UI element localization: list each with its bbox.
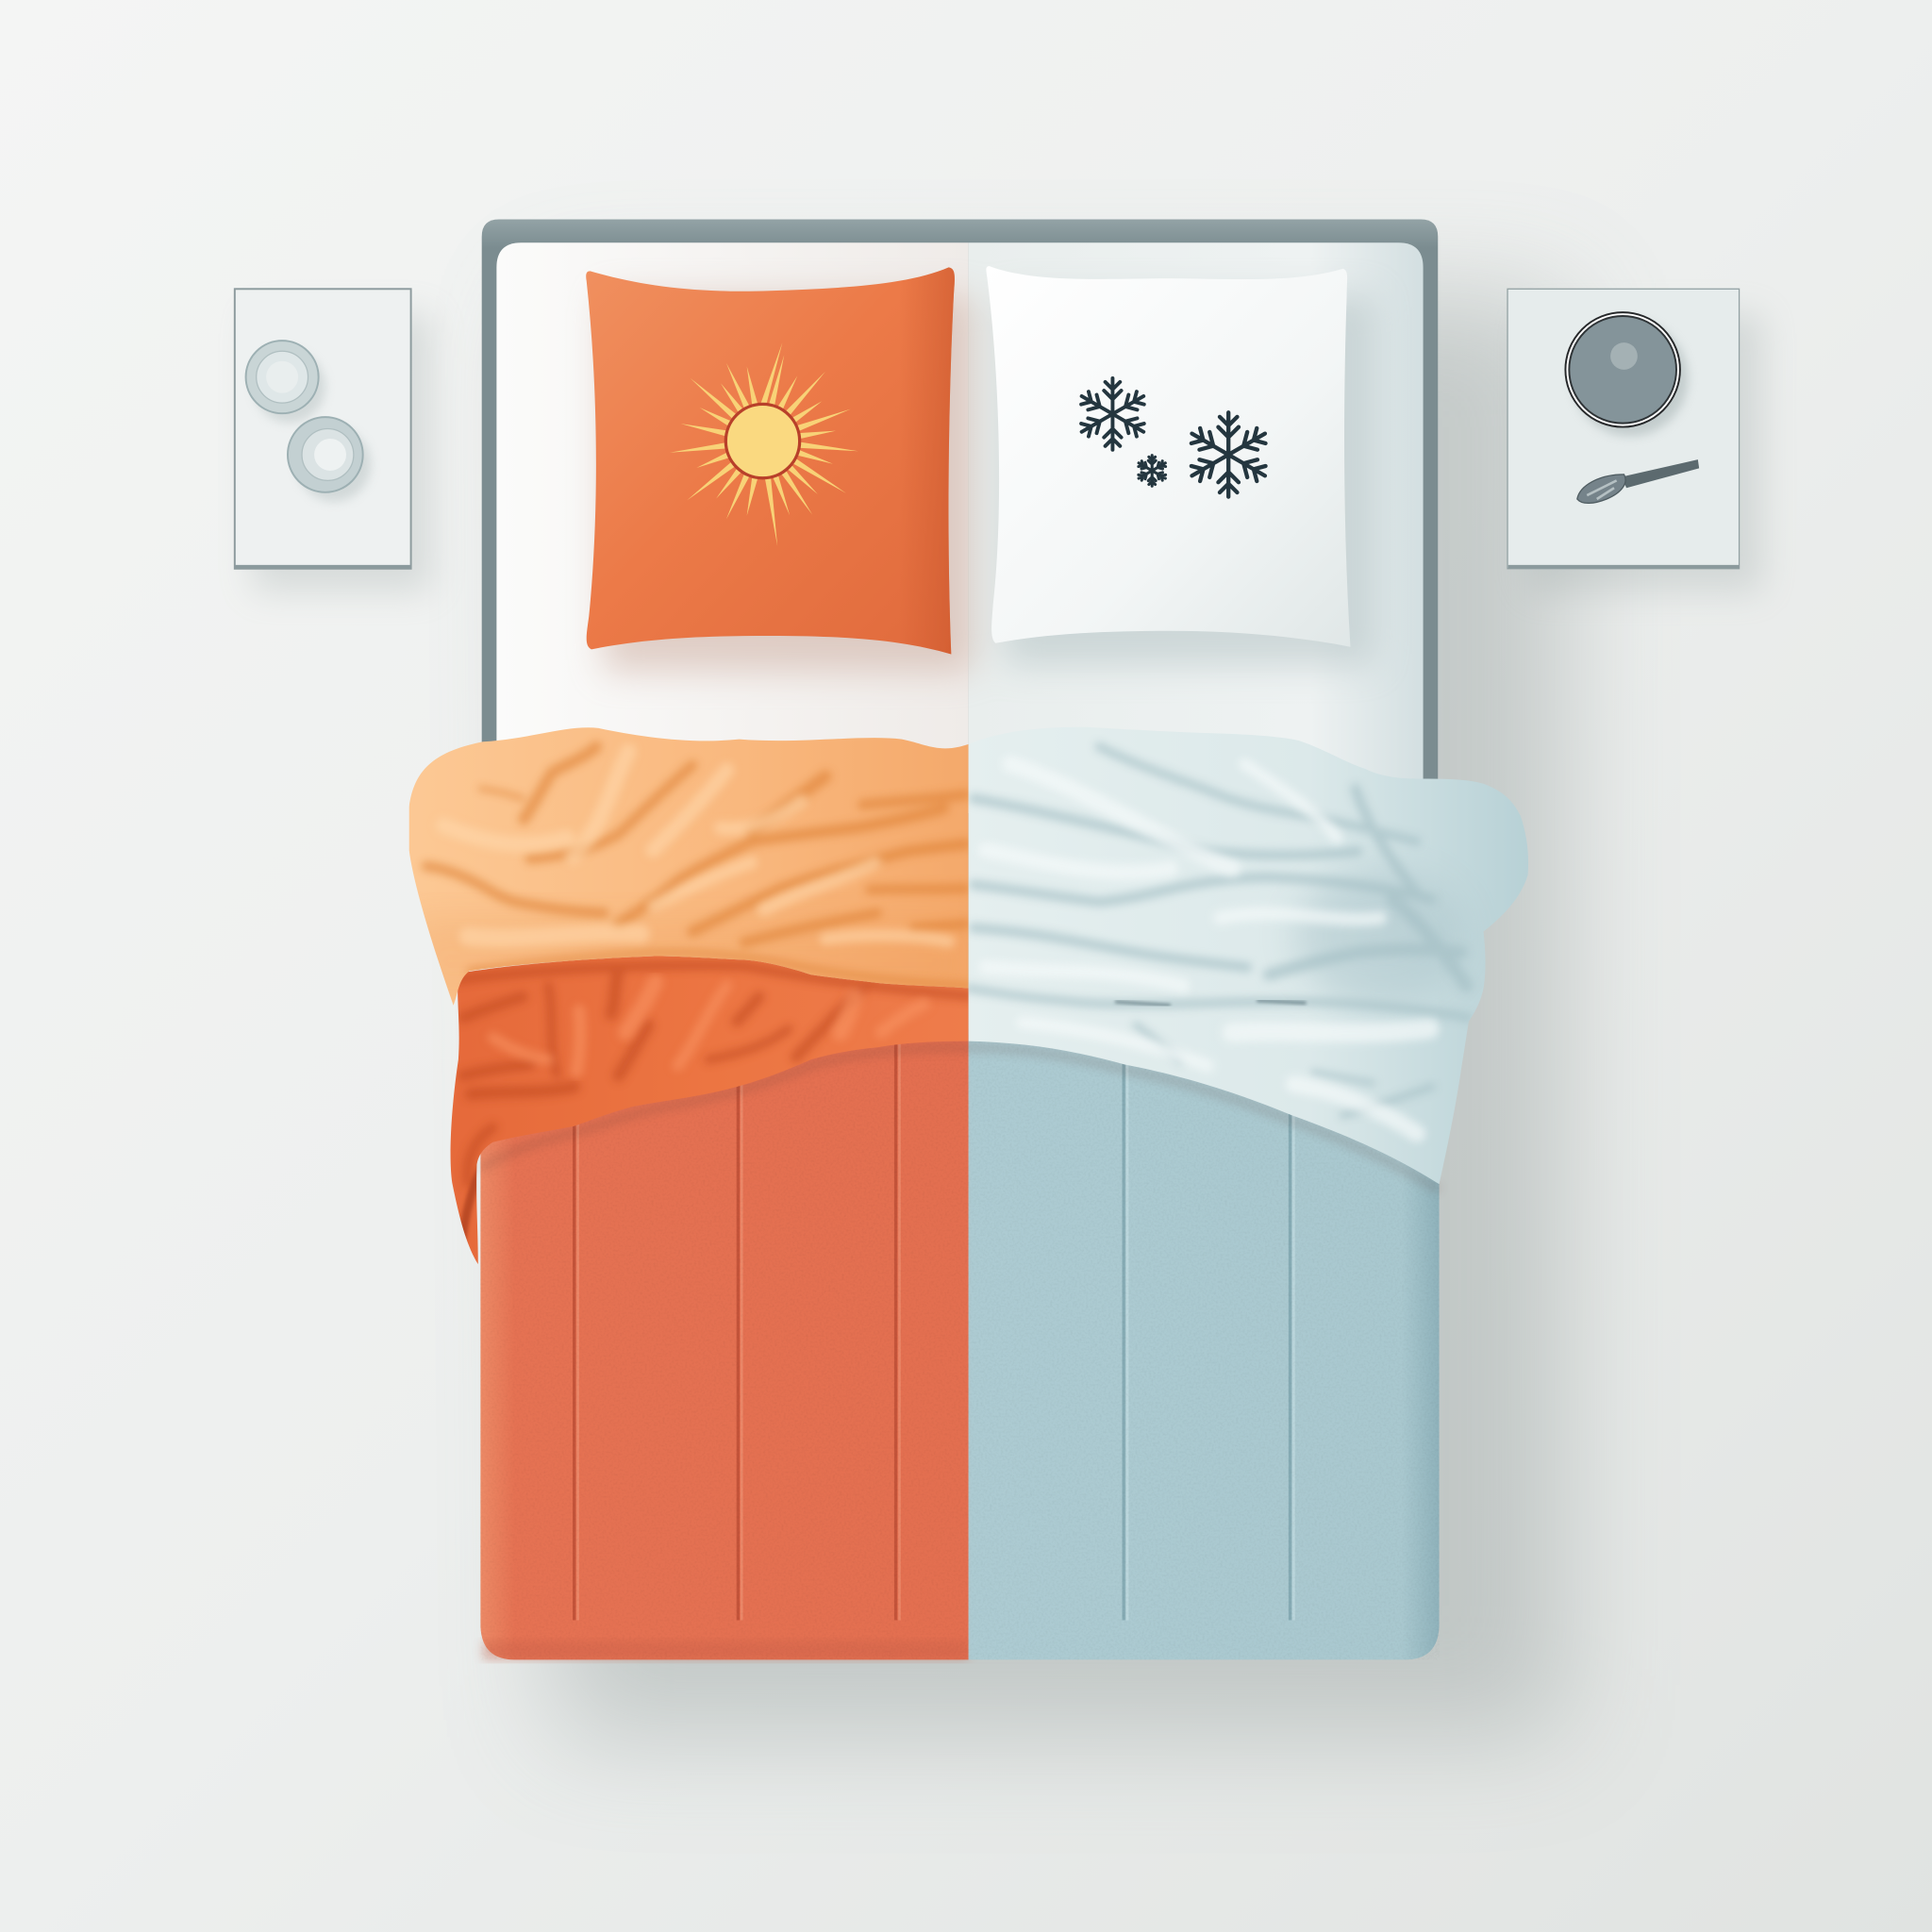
icon: small snowflake xyxy=(1137,456,1167,486)
icon: sun xyxy=(670,342,858,546)
icon: large left snowflake xyxy=(1077,378,1148,450)
bed drop shadow xyxy=(542,295,1565,1738)
blanket seams cool xyxy=(1124,1047,1293,1621)
panel: white pillow xyxy=(986,266,1351,647)
panel: white duvet xyxy=(969,721,1535,1201)
panel: left nightstand xyxy=(235,289,431,591)
pillow shadows xyxy=(604,295,1374,672)
panel: mattress cool side xyxy=(969,242,1424,813)
icon: upper round dish xyxy=(246,341,325,423)
panel: headboard frame xyxy=(482,219,1438,801)
duvet cast shadow xyxy=(480,1047,1440,1191)
panel: right nightstand xyxy=(1507,289,1762,591)
panel: peach duvet xyxy=(400,721,974,1017)
blanket seams warm xyxy=(575,1035,899,1621)
panel: darker orange duvet fold xyxy=(451,957,968,1264)
icon: spoon xyxy=(1577,459,1699,503)
icon: lower round dish xyxy=(288,417,371,502)
panel: orange pillow xyxy=(586,267,955,655)
illustration: dual temperature bed seen from above xyxy=(234,219,1932,1932)
icon: large right snowflake xyxy=(1187,412,1270,497)
panel: blanket cool side xyxy=(969,1029,1440,1659)
icon: round device xyxy=(1565,312,1688,436)
panel: mattress warm side xyxy=(496,242,969,813)
panel: blanket warm side xyxy=(480,1029,969,1659)
